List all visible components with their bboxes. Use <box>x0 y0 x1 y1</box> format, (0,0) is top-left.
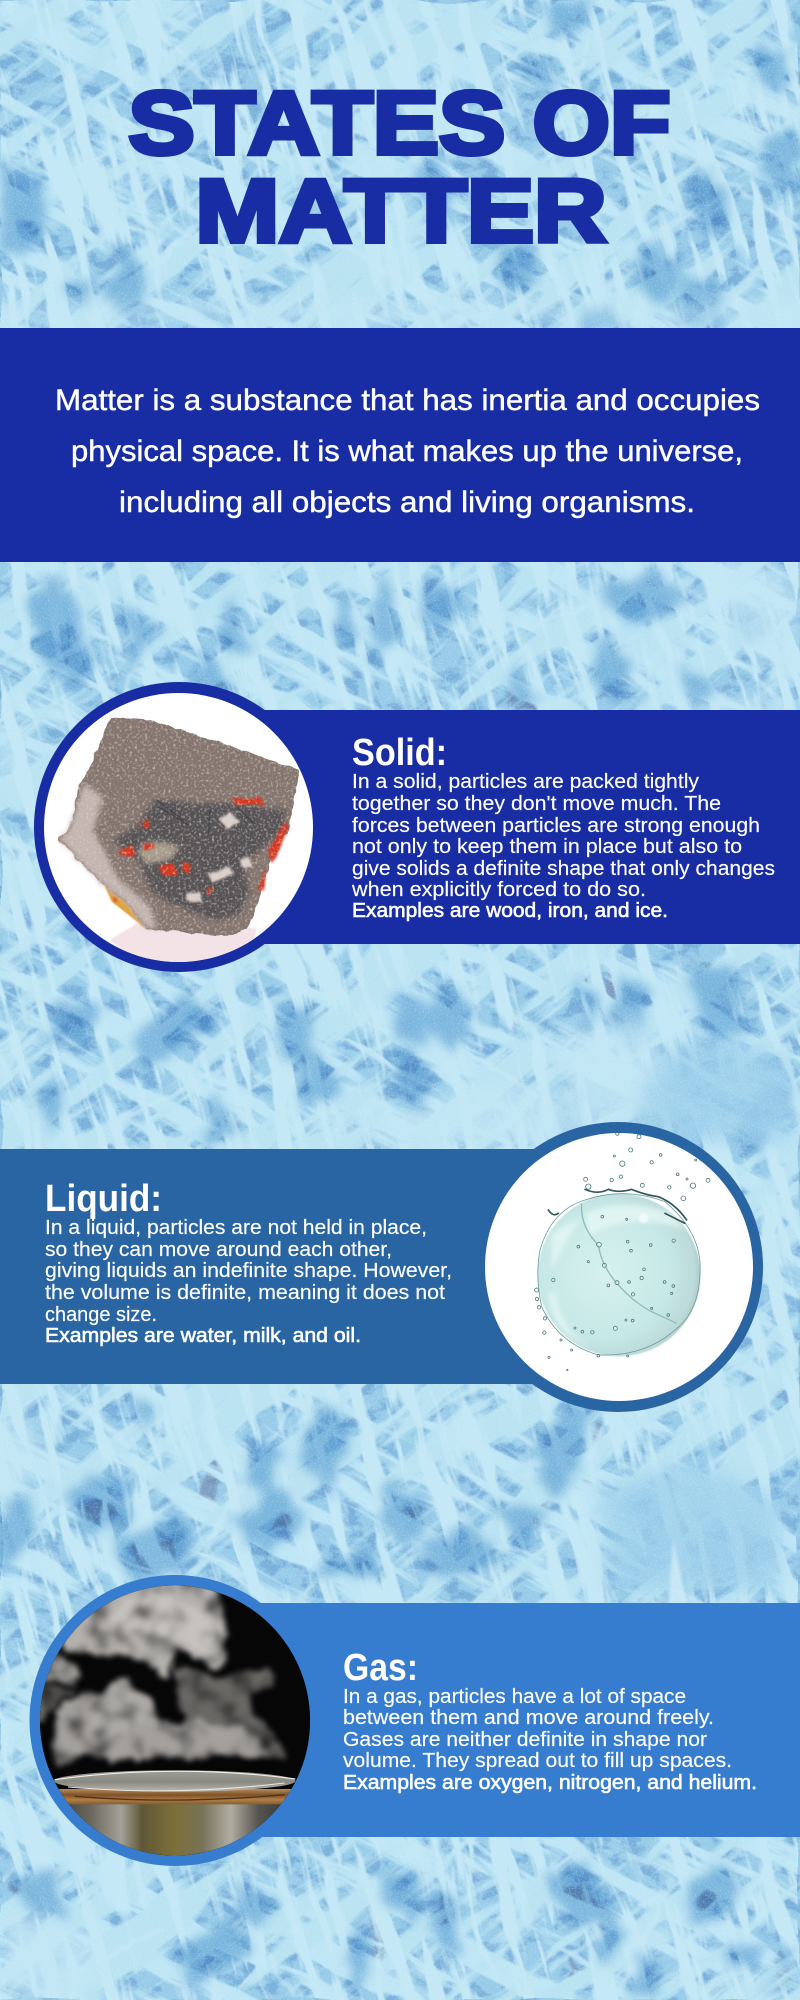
text: solid description: together so they don't move much. The <box>352 792 721 815</box>
text: solid description: when explicitly forced to do so. <box>351 878 646 901</box>
text: liquid description <box>45 1216 452 1347</box>
panel: solid <box>34 682 800 972</box>
heading: gas: Gas: <box>343 1647 418 1689</box>
text: solid description: forces between particles are strong enough <box>352 814 760 837</box>
text: solid description <box>351 770 775 922</box>
image: steam over pot <box>40 1586 310 1856</box>
title: MATTER <box>196 160 606 260</box>
image: rock <box>58 717 300 965</box>
heading: solid: Solid: <box>352 732 447 774</box>
text: liquid description: Examples are water, milk, and oil. <box>45 1324 361 1347</box>
text: liquid description: In a liquid, particles are not held in place, <box>45 1216 427 1239</box>
panel: liquid <box>0 1122 763 1412</box>
text: solid description: give solids a definite shape that only changes <box>352 857 775 880</box>
text: solid description: not only to keep them in place but also to <box>352 835 742 858</box>
title <box>128 72 670 260</box>
text: liquid description: so they can move around each other, <box>45 1238 392 1261</box>
text: gas description: between them and move around freely. <box>343 1706 714 1729</box>
pot <box>54 1770 295 1863</box>
heading: liquid: Liquid: <box>45 1178 162 1220</box>
text: gas description: Gases are neither definite in shape nor <box>343 1728 707 1751</box>
text: liquid description: change size. <box>45 1303 157 1326</box>
text: solid description: In a solid, particles are packed tightly <box>352 770 700 793</box>
text: solid description: Examples are wood, iron, and ice. <box>352 899 668 922</box>
image: water splash <box>535 1132 710 1371</box>
text: gas description: Examples are oxygen, nitrogen, and helium. <box>343 1771 757 1794</box>
panel: gas <box>30 1570 800 1866</box>
text: gas description: volume. They spread out to fill up spaces. <box>343 1749 732 1772</box>
panel: introduction: physical space. It is what makes up the universe, <box>71 435 743 468</box>
text: gas description <box>343 1685 757 1794</box>
text: liquid description: the volume is definite, meaning it does not <box>45 1281 445 1304</box>
text: gas description: In a gas, particles have a lot of space <box>343 1685 686 1708</box>
text: liquid description: giving liquids an indefinite shape. However, <box>45 1259 452 1282</box>
panel: introduction <box>0 328 800 562</box>
title: STATES OF <box>128 72 670 172</box>
panel: introduction: including all objects and living organisms. <box>119 486 695 519</box>
panel: introduction: Matter is a substance that has inertia and occupies <box>55 384 760 417</box>
